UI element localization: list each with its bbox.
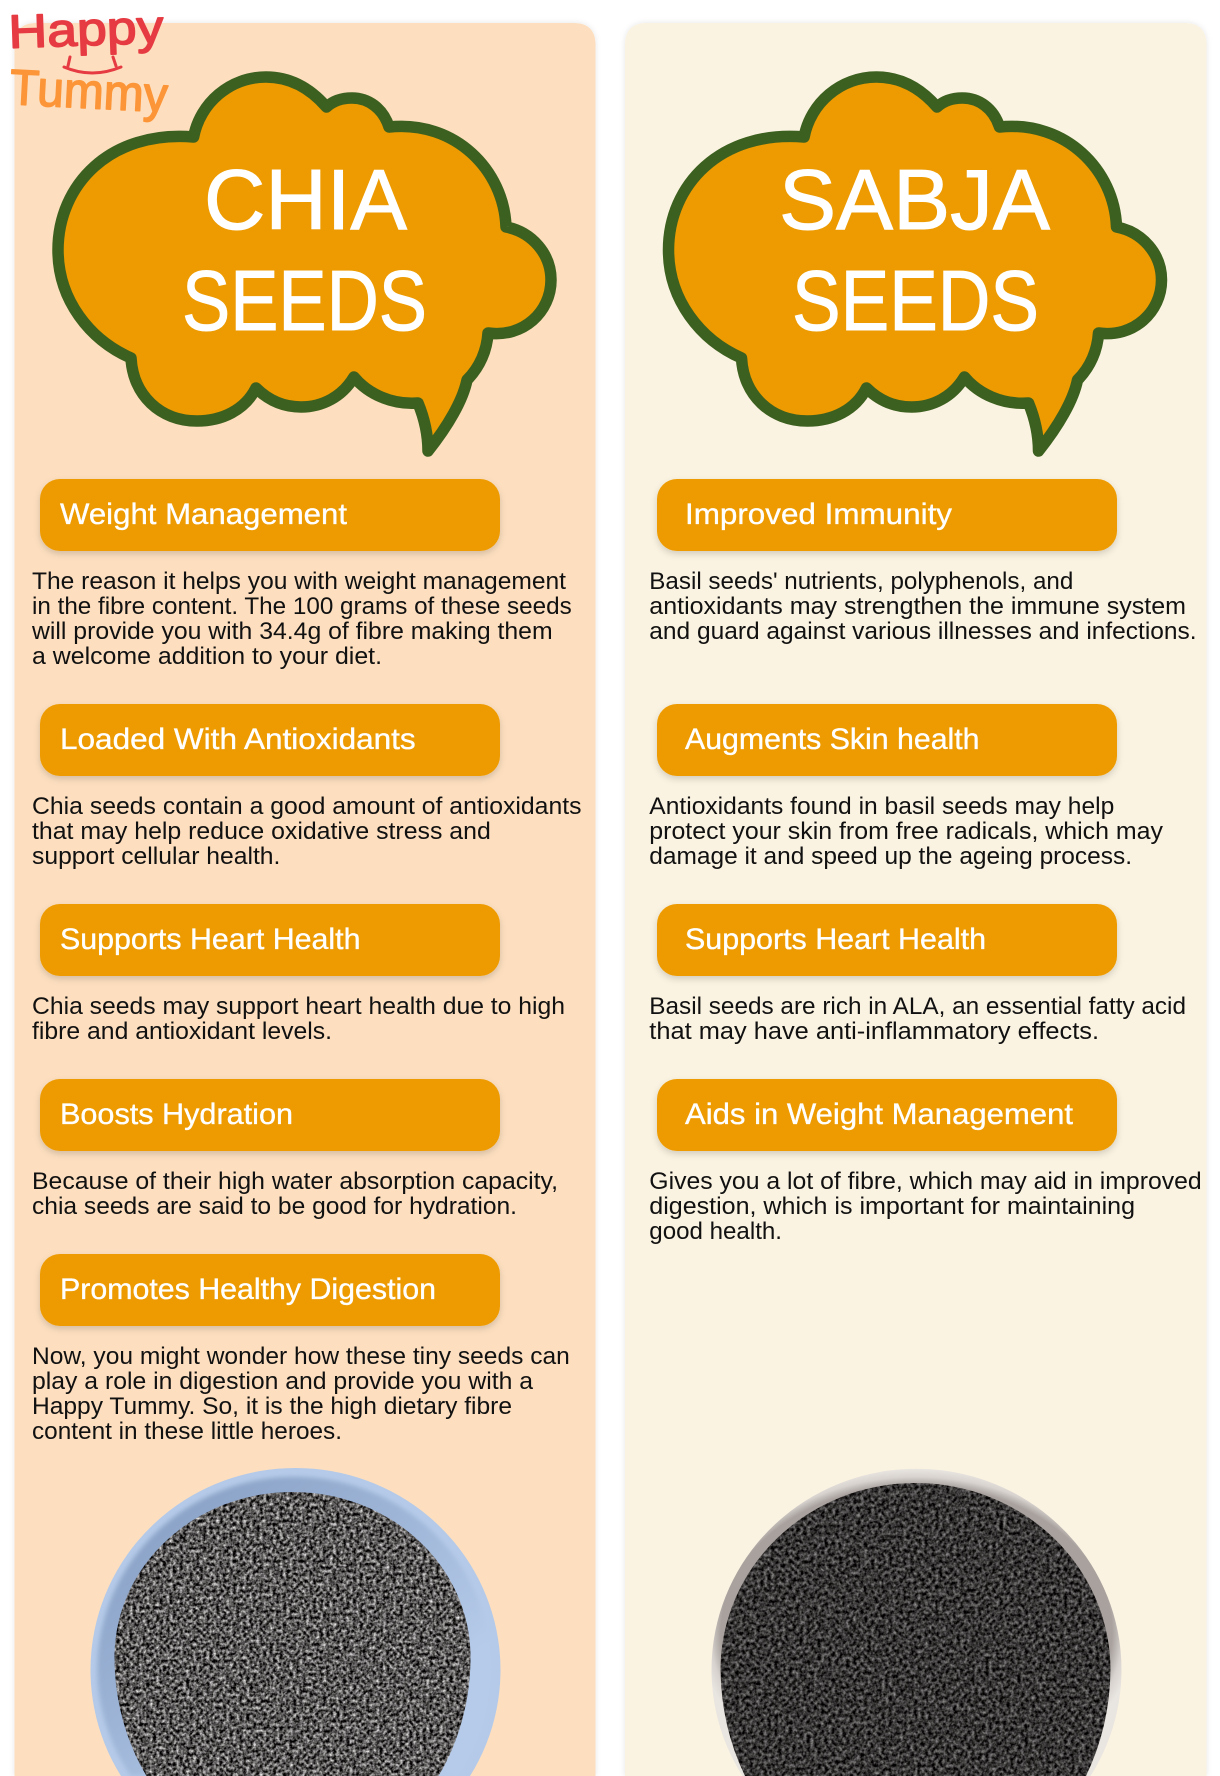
body text	[649, 993, 1186, 1045]
body text: Chia seeds contain a good amount of antioxidants	[32, 793, 582, 820]
heading: sabja: SABJA	[779, 153, 1050, 248]
benefit: digestion	[32, 1254, 570, 1445]
body text: Basil seeds' nutrients, polyphenols, and	[649, 568, 1073, 595]
body text: fibre and antioxidant levels.	[32, 1018, 332, 1045]
body text: Now, you might wonder how these tiny seeds can	[32, 1343, 570, 1370]
pill	[40, 1079, 500, 1151]
body text: The reason it helps you with weight management	[32, 568, 566, 595]
benefit: weight management	[31, 479, 572, 670]
benefit: hydration	[32, 1079, 558, 1220]
logo word: Tummy: Tummy	[8, 59, 169, 123]
body text: good health.	[649, 1218, 782, 1245]
seeds	[114, 1492, 470, 1776]
body text: Antioxidants found in basil seeds may help	[649, 793, 1114, 820]
body text	[649, 1168, 1202, 1245]
body text: damage it and speed up the ageing process.	[649, 843, 1132, 870]
pill	[40, 1254, 500, 1326]
body text: play a role in digestion and provide you with a	[32, 1368, 534, 1395]
bowl inner wall	[97, 1477, 492, 1776]
pill title: Augments Skin health	[685, 723, 980, 756]
logo word: Happy: Happy	[7, 0, 165, 58]
heading: seeds: SEEDS	[182, 254, 427, 349]
benefit: weight management	[649, 1079, 1202, 1245]
body text	[32, 793, 582, 870]
body text: that may have anti-inflammatory effects.	[649, 1018, 1099, 1045]
benefit: skin health	[649, 704, 1163, 870]
body text: chia seeds are said to be good for hydration.	[32, 1193, 517, 1220]
body text: Chia seeds may support heart health due to high	[32, 993, 565, 1020]
heading: chia: CHIA	[204, 153, 407, 248]
pill title: Boosts Hydration	[60, 1098, 293, 1131]
body text: a welcome addition to your diet.	[32, 643, 382, 670]
pill title: Aids in Weight Management	[685, 1098, 1074, 1131]
body text: Happy Tummy. So, it is the high dietary fibre	[32, 1393, 512, 1420]
seeds	[720, 1483, 1110, 1776]
bowl of sabja seeds	[712, 1469, 1122, 1776]
benefit: antioxidants	[32, 704, 582, 870]
pill title: Weight Management	[60, 498, 348, 531]
body text	[649, 793, 1163, 870]
body text: Basil seeds are rich in ALA, an essential fatty acid	[649, 993, 1186, 1020]
pill title: Loaded With Antioxidants	[60, 723, 416, 756]
bowl rim	[90, 1468, 500, 1776]
body text: and guard against various illnesses and infections.	[649, 618, 1197, 645]
body text: that may help reduce oxidative stress and	[32, 818, 491, 845]
pill title: Promotes Healthy Digestion	[60, 1273, 436, 1306]
body text: in the fibre content. The 100 grams of these seeds	[32, 593, 572, 620]
pill	[657, 704, 1117, 776]
logo smile	[64, 57, 121, 73]
benefit: heart health	[649, 904, 1186, 1045]
heading: seeds: SEEDS	[792, 254, 1039, 349]
bowl of chia seeds	[90, 1468, 500, 1776]
speech bubble: sabja seeds	[668, 77, 1162, 451]
pill title: Improved Immunity	[685, 498, 952, 531]
body text	[31, 568, 572, 670]
speech bubble: chia seeds	[58, 77, 551, 451]
pill	[40, 904, 500, 976]
body text: antioxidants may strengthen the immune system	[649, 593, 1186, 620]
panel background: sabja	[625, 23, 1206, 1776]
logo: Happy Tummy	[7, 0, 169, 123]
panel background: chia	[14, 23, 596, 1776]
body text: digestion, which is important for maintaining	[649, 1193, 1135, 1220]
benefit: heart health	[32, 904, 565, 1045]
cloud shape: chia	[58, 77, 551, 451]
body text	[32, 1168, 558, 1220]
pill	[657, 479, 1117, 551]
body text: protect your skin from free radicals, which may	[649, 818, 1163, 845]
bowl	[712, 1469, 1122, 1776]
panel: sabja seeds	[625, 23, 1206, 1776]
pill title: Supports Heart Health	[685, 923, 986, 956]
body text	[649, 568, 1197, 645]
panel: chia seeds	[14, 23, 596, 1776]
pill	[40, 704, 500, 776]
pill	[657, 1079, 1117, 1151]
body text	[32, 1343, 570, 1445]
pill	[657, 904, 1117, 976]
body text: support cellular health.	[32, 843, 280, 870]
body text: Gives you a lot of fibre, which may aid in improved	[649, 1168, 1202, 1195]
cloud shape: sabja	[668, 77, 1162, 451]
pill	[40, 479, 500, 551]
body text	[32, 993, 565, 1045]
pill title: Supports Heart Health	[60, 923, 360, 956]
body text: content in these little heroes.	[32, 1418, 342, 1445]
body text: Because of their high water absorption capacity,	[32, 1168, 558, 1195]
benefit: immunity	[649, 479, 1197, 645]
body text: will provide you with 34.4g of fibre making them	[31, 618, 553, 645]
